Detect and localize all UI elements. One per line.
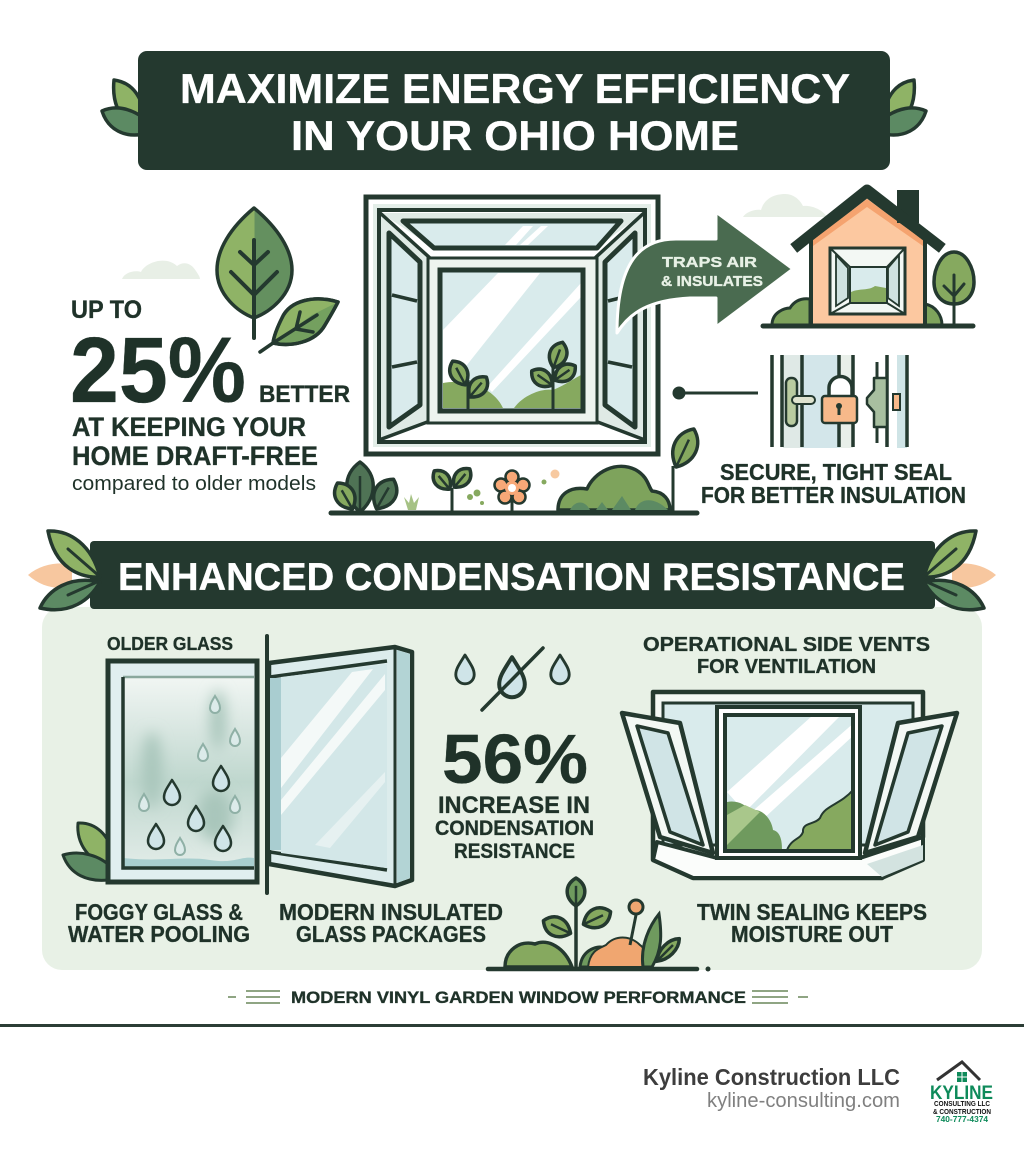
panel: 25 percent draft-free statistic: HOME DRAFT-FREE bbox=[72, 441, 318, 471]
illustration: garden strip bbox=[329, 424, 704, 514]
text: secure tight seal bbox=[701, 459, 966, 508]
panel: 25 percent draft-free statistic bbox=[70, 208, 350, 495]
arrow: traps air and insulates bbox=[617, 212, 793, 333]
stat: 56 percent bbox=[435, 720, 594, 863]
stat: 56 percent: 56% bbox=[442, 720, 588, 798]
panel: condensation background bbox=[42, 607, 982, 970]
title banner bbox=[102, 51, 926, 170]
panel: 25 percent draft-free statistic: AT KEEPING YOUR bbox=[72, 412, 306, 442]
illustration: bottom plants bbox=[488, 878, 710, 972]
footer rule bbox=[0, 1024, 1024, 1027]
caption: side vents bbox=[643, 634, 930, 678]
logo: Kyline bbox=[930, 1062, 993, 1124]
illustration: bay window with side vents bbox=[622, 692, 957, 878]
logo: Kyline: & CONSTRUCTION bbox=[933, 1107, 991, 1116]
stat: 56 percent: CONDENSATION bbox=[435, 817, 594, 840]
panel: 25 percent draft-free statistic: 25% bbox=[70, 318, 246, 422]
section banner: enhanced condensation resistance bbox=[28, 531, 996, 610]
stat: 56 percent: RESISTANCE bbox=[454, 840, 575, 863]
arrow: traps air and insulates: & INSULATES bbox=[661, 273, 763, 290]
panel: 25 percent draft-free statistic: BETTER bbox=[259, 381, 350, 408]
caption: modern glass bbox=[279, 899, 503, 947]
title banner: IN YOUR OHIO HOME bbox=[291, 112, 739, 159]
logo: Kyline: CONSULTING LLC bbox=[934, 1099, 990, 1108]
caption: foggy glass: FOGGY GLASS & bbox=[75, 899, 243, 925]
caption: foggy glass: WATER POOLING bbox=[68, 921, 250, 947]
panel: 25 percent draft-free statistic: UP TO bbox=[71, 296, 142, 324]
caption: modern glass: MODERN INSULATED bbox=[279, 899, 503, 925]
icon: house bbox=[743, 190, 974, 326]
caption: twin sealing: MOISTURE OUT bbox=[731, 921, 893, 947]
section banner: enhanced condensation resistance: ENHANCED CONDENSATION RESISTANCE bbox=[118, 556, 905, 599]
text: secure tight seal: FOR BETTER INSULATION bbox=[701, 482, 966, 508]
company name bbox=[643, 1064, 900, 1112]
logo: Kyline: 740-777-4374 bbox=[936, 1114, 988, 1124]
caption: twin sealing: TWIN SEALING KEEPS bbox=[697, 899, 927, 925]
stat: 56 percent: INCREASE IN bbox=[438, 792, 590, 819]
caption: twin sealing bbox=[697, 899, 927, 947]
caption: side vents: OPERATIONAL SIDE VENTS bbox=[643, 634, 930, 656]
icon: blocked water drops bbox=[456, 648, 569, 710]
company name: kyline-consulting.com bbox=[707, 1090, 900, 1112]
title banner: MAXIMIZE ENERGY EFFICIENCY bbox=[180, 65, 850, 112]
comparison: older glass bbox=[63, 634, 257, 882]
icon: lock seal bbox=[772, 355, 907, 448]
caption: foggy glass bbox=[68, 899, 250, 947]
comparison: older glass: OLDER GLASS bbox=[107, 634, 233, 654]
panel: 25 percent draft-free statistic: compared to older models bbox=[72, 473, 316, 495]
text: secure tight seal: SECURE, TIGHT SEAL bbox=[720, 459, 952, 485]
footer caption: modern vinyl garden window performance: MODERN VINYL GARDEN WINDOW PERFORMANCE bbox=[291, 988, 746, 1007]
comparison: modern insulated glass bbox=[269, 647, 412, 886]
logo: Kyline: KYLINE bbox=[930, 1083, 993, 1104]
caption: side vents: FOR VENTILATION bbox=[697, 656, 876, 678]
divider bbox=[265, 636, 269, 893]
callout connector bbox=[672, 386, 758, 400]
company name: Kyline Construction LLC bbox=[643, 1064, 900, 1090]
caption: modern glass: GLASS PACKAGES bbox=[296, 921, 486, 947]
illustration: garden window bbox=[366, 197, 658, 454]
arrow: traps air and insulates: TRAPS AIR bbox=[662, 254, 757, 271]
